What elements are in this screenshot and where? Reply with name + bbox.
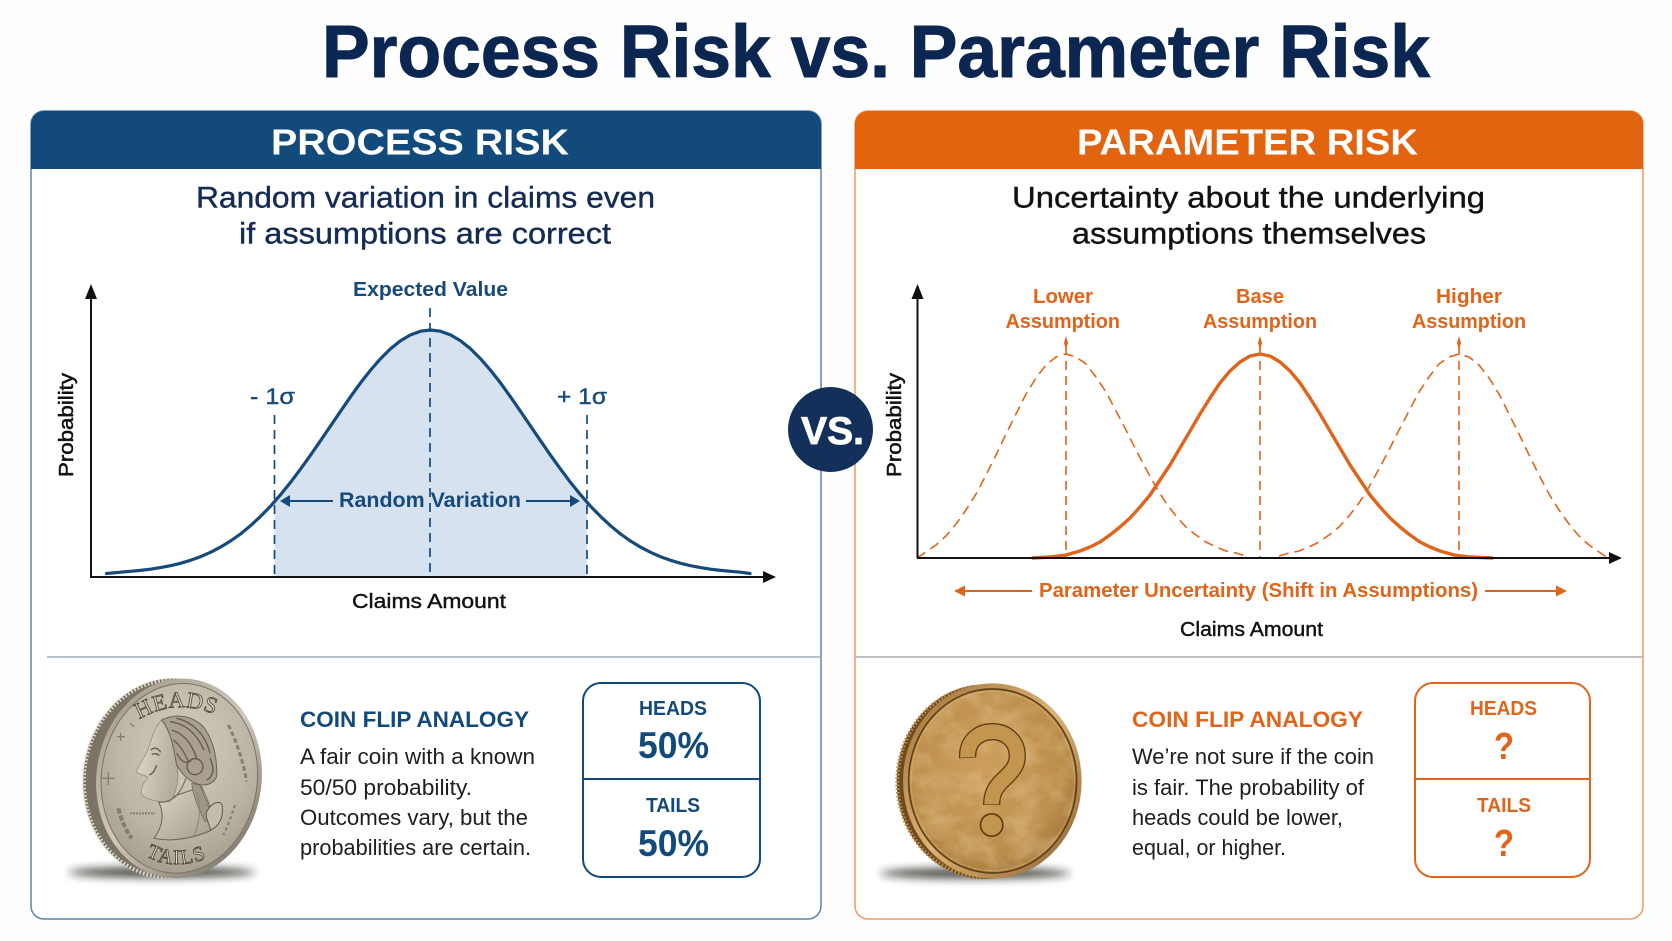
- coin rim marks: [102, 723, 247, 838]
- label: higher assumption: Assumption: [1412, 311, 1526, 333]
- analogy text: process risk: A fair coin with a known: [300, 744, 535, 769]
- probability box: process risk: HEADS: [639, 698, 707, 720]
- probability box: parameter risk: TAILS: [1477, 795, 1531, 817]
- coin portrait: [137, 716, 222, 840]
- label: parameter uncertainty with arrows: Parameter Uncertainty (Shift in Assumptions): [1039, 580, 1478, 602]
- title: Process Risk vs. Parameter Risk: [322, 10, 1431, 93]
- icon: gold question coin: [880, 683, 1082, 879]
- axes: [912, 284, 1622, 564]
- analogy text: process risk: probabilities are certain.: [300, 835, 531, 860]
- subtitle: parameter risk: Uncertainty about the underlying: [1012, 182, 1485, 214]
- probability box: process risk: 50%: [638, 823, 709, 864]
- label: random variation with arrows: [280, 489, 580, 512]
- coin lettering: TAILS: [148, 844, 204, 865]
- analogy text: process risk: 50/50 probability.: [300, 775, 472, 800]
- label: plus one sigma: + 1σ: [557, 384, 607, 409]
- curve: lower assumption: [917, 354, 1246, 558]
- coin lettering: HEADS: [132, 692, 218, 720]
- analogy text: parameter risk: is fair. The probability of: [1132, 775, 1365, 800]
- probability box: parameter risk: HEADS: [1470, 698, 1537, 720]
- x axis label: Claims Amount: [352, 591, 506, 613]
- vertical assumption markers: [1064, 336, 1461, 558]
- probability box: parameter risk: ?: [1494, 726, 1514, 768]
- probability box: parameter risk: [1415, 683, 1590, 877]
- analogy text: process risk: COIN FLIP ANALOGY: [300, 707, 529, 732]
- label: lower assumption: Assumption: [1006, 311, 1120, 333]
- header: process risk: [31, 111, 821, 169]
- question mark: [968, 732, 1017, 837]
- x axis label: Claims Amount: [1180, 619, 1323, 641]
- analogy text: process risk: Outcomes vary, but the: [300, 805, 528, 830]
- analogy text: parameter risk: [1132, 707, 1374, 860]
- probability box: parameter risk: ?: [1494, 823, 1514, 865]
- probability box: process risk: [583, 683, 760, 877]
- bell curve chart: process risk: [56, 279, 776, 613]
- panel: parameter risk: [855, 111, 1643, 919]
- vs badge: [788, 387, 873, 472]
- y axis label: Probability: [884, 373, 906, 477]
- header: parameter risk: [855, 111, 1643, 169]
- label: expected value: Expected Value: [353, 279, 508, 301]
- subtitle: process risk: if assumptions are correct: [239, 218, 612, 250]
- label: minus one sigma: - 1σ: [250, 384, 295, 409]
- subtitle: process risk: [196, 182, 655, 250]
- label: lower assumption: Lower: [1033, 286, 1093, 308]
- shifted bell curves chart: parameter risk: [884, 284, 1622, 641]
- probability box: process risk: TAILS: [646, 795, 700, 817]
- curve: higher assumption: [1279, 354, 1608, 558]
- label: base assumption: Assumption: [1203, 311, 1317, 333]
- coin lettering: [132, 692, 218, 865]
- label: random variation with arrows: Random Variation: [339, 489, 521, 512]
- analogy text: process risk: [300, 707, 535, 860]
- subtitle: parameter risk: assumptions themselves: [1072, 218, 1426, 250]
- vs badge: VS.: [801, 410, 864, 453]
- label: lower assumption: [1006, 286, 1120, 333]
- label: higher assumption: [1412, 286, 1526, 333]
- curve: base assumption: [1033, 354, 1492, 558]
- label: base assumption: Base: [1236, 286, 1284, 308]
- header: parameter risk: PARAMETER RISK: [1077, 122, 1418, 162]
- header: process risk: PROCESS RISK: [271, 122, 569, 162]
- probability box: process risk: 50%: [638, 725, 709, 766]
- label: base assumption: [1203, 286, 1317, 333]
- icon: silver coin: [65, 678, 262, 884]
- analogy text: parameter risk: We’re not sure if the coin: [1132, 744, 1374, 769]
- analogy text: parameter risk: equal, or higher.: [1132, 835, 1286, 860]
- analogy text: parameter risk: heads could be lower,: [1132, 805, 1343, 830]
- analogy text: parameter risk: COIN FLIP ANALOGY: [1132, 707, 1363, 732]
- axes: [85, 284, 776, 583]
- panel: process risk: [30, 110, 822, 920]
- subtitle: process risk: Random variation in claims even: [196, 182, 655, 214]
- y axis label: Probability: [56, 373, 78, 477]
- subtitle: parameter risk: [1012, 182, 1485, 250]
- label: higher assumption: Higher: [1436, 286, 1502, 308]
